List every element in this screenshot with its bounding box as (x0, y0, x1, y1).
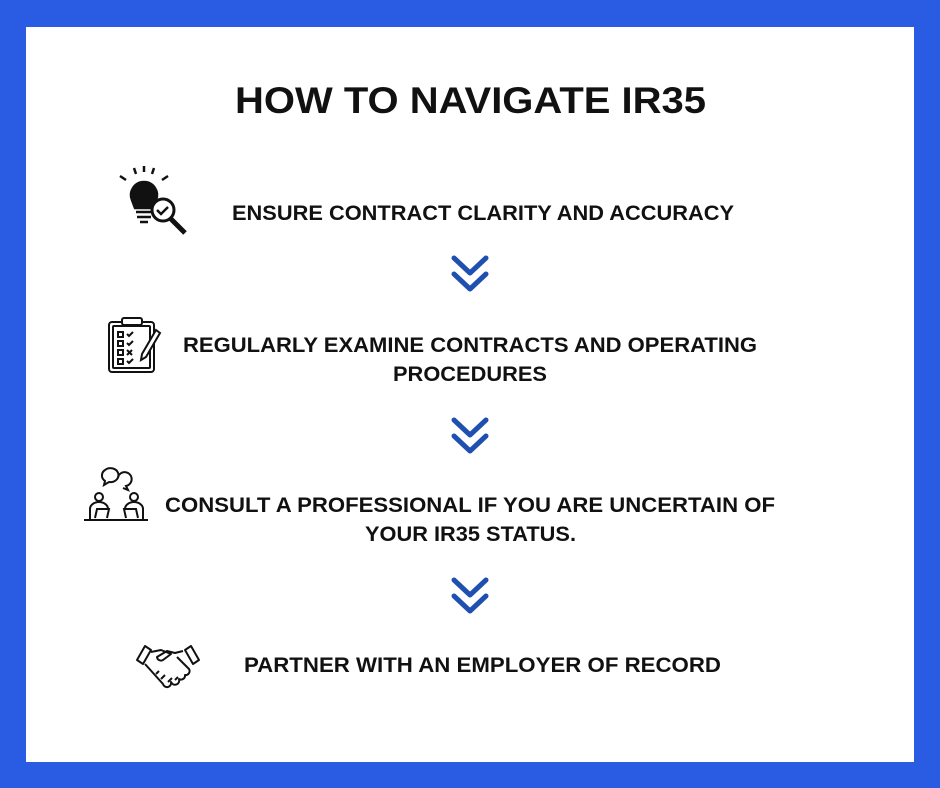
step 3 text (165, 494, 775, 546)
step 2 text: REGULARLY EXAMINE CONTRACTS AND OPERATING (183, 334, 757, 357)
step 2 text: PROCEDURES (393, 363, 547, 386)
step 2 text (183, 334, 757, 386)
arrow: chevron 1 (454, 258, 486, 289)
icon: handshake (137, 646, 199, 687)
step 3 text: YOUR IR35 STATUS. (365, 523, 576, 546)
arrow: chevron 3 (454, 580, 486, 611)
arrow: chevron 2 (454, 420, 486, 451)
icon: lightbulb with magnifier (120, 166, 185, 233)
icon: clipboard checklist (109, 318, 160, 372)
step 3 text: CONSULT A PROFESSIONAL IF YOU ARE UNCERTAIN OF (165, 494, 775, 517)
title: HOW TO NAVIGATE IR35 (235, 80, 706, 121)
icon: consulting people (84, 468, 148, 520)
step 1 text: ENSURE CONTRACT CLARITY AND ACCURACY (232, 202, 734, 225)
step 4 text: PARTNER WITH AN EMPLOYER OF RECORD (244, 654, 721, 677)
